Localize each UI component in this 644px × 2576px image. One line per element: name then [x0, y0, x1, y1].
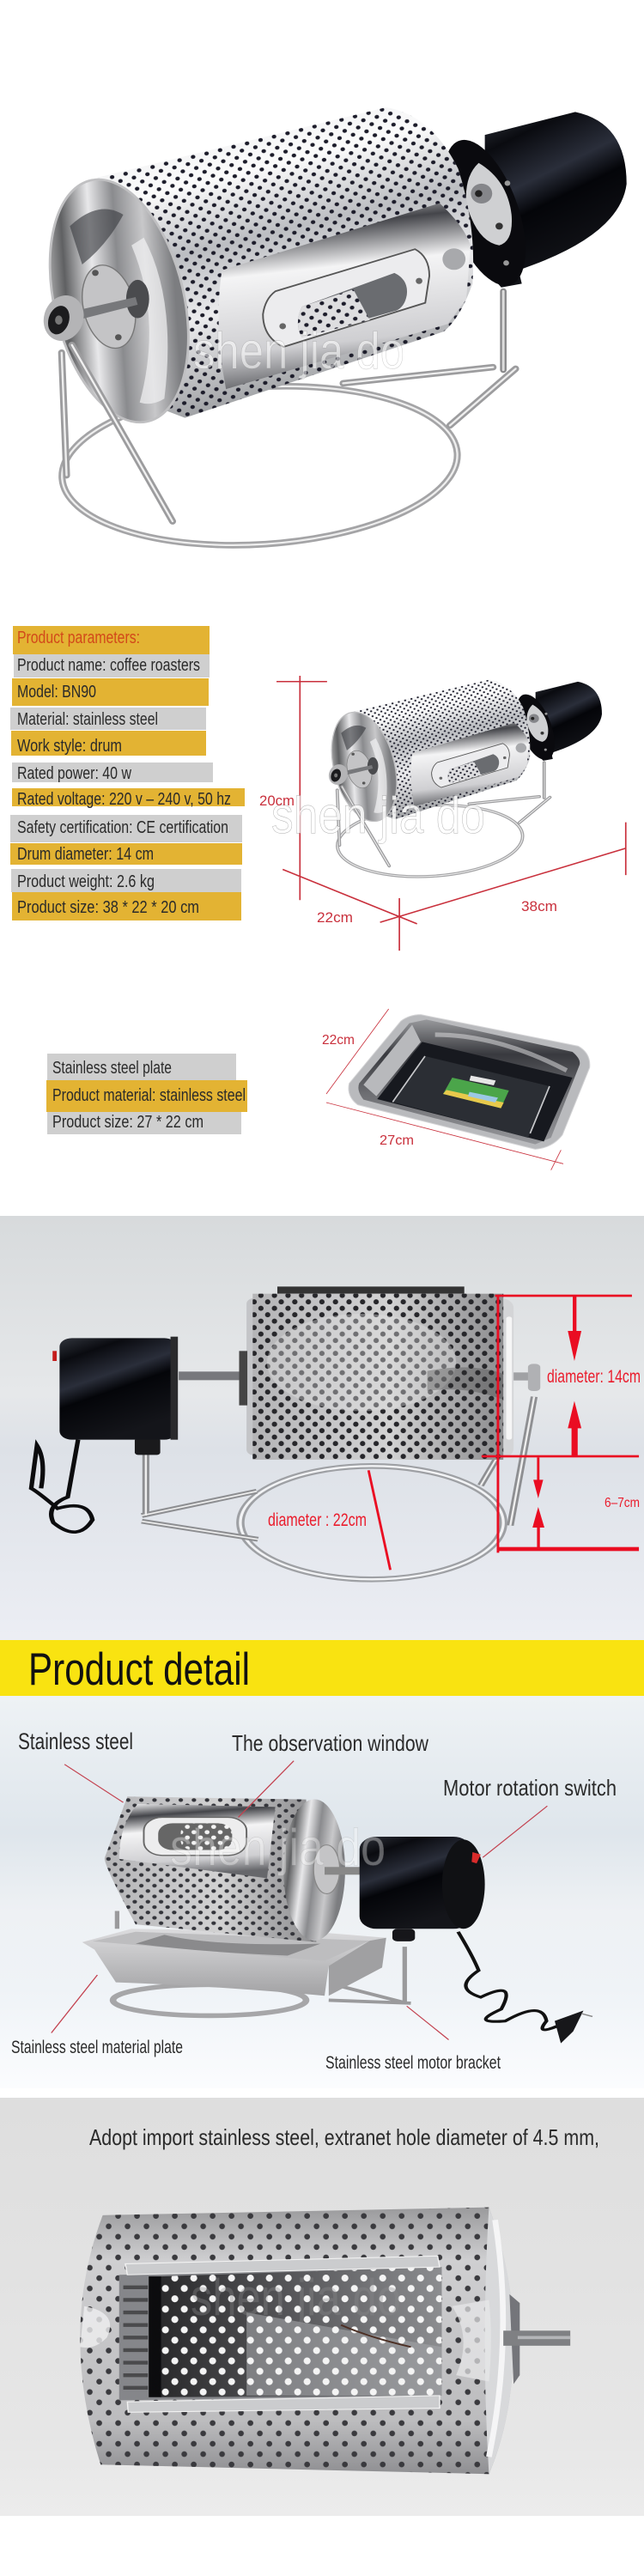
- row: rated power: Rated power: 40 w: [17, 764, 131, 783]
- red measurement marks: [482, 1295, 639, 1552]
- row: safety certification: [10, 815, 242, 842]
- watermark: shen jia do: [191, 2269, 401, 2326]
- row: product weight: [11, 869, 241, 892]
- drum: [105, 1796, 316, 1942]
- dimensioned roaster diagram: [259, 676, 626, 951]
- panel: product detail photo: [0, 1696, 644, 2088]
- row: product name: [14, 654, 210, 677]
- row: product size: [12, 892, 241, 920]
- motor: [59, 1338, 177, 1440]
- row: model: Model: BN90: [17, 683, 96, 702]
- row: product name: Product name: coffee roasters: [17, 656, 200, 675]
- row: safety certification: Safety certification: CE certification: [17, 818, 228, 837]
- label: width: 38cm: [521, 898, 557, 914]
- row: product size: Product size: 38 * 22 * 20 cm: [17, 898, 199, 917]
- callout: observation window: The observation window: [232, 1730, 428, 1756]
- heading: product parameters: [13, 626, 210, 654]
- callout: stainless steel: Stainless steel: [18, 1728, 133, 1754]
- watermark: shen jia do: [193, 322, 404, 380]
- panel: side view photo with measurements: [0, 1216, 644, 1640]
- row: work style: [11, 731, 206, 756]
- row: plate name: Stainless steel plate: [52, 1059, 172, 1078]
- watermark: shen jia do: [271, 787, 485, 844]
- label: stand diameter: diameter : 22cm: [268, 1510, 367, 1530]
- row: plate size: Product size: 27 * 22 cm: [52, 1113, 204, 1132]
- row: rated voltage: Rated voltage: 220 v – 240 v, 50 hz: [17, 790, 231, 809]
- dimension lines: [276, 676, 626, 951]
- label: plate width: 27cm: [380, 1133, 414, 1148]
- plate diagram: [322, 1009, 590, 1170]
- panel: product parameters: [10, 626, 245, 920]
- shaft: [509, 2294, 519, 2384]
- drum shell: [80, 2208, 513, 2474]
- row: product weight: Product weight: 2.6 kg: [17, 872, 155, 891]
- row: drum diameter: Drum diameter: 14 cm: [17, 845, 154, 864]
- stand: [142, 1397, 534, 1579]
- window: [119, 2267, 441, 2400]
- power cord: [31, 1440, 93, 1532]
- row: plate material: [46, 1080, 247, 1112]
- row: plate material: Product material: stainless steel: [52, 1086, 246, 1105]
- banner: product detail: Product detail: [28, 1644, 250, 1695]
- banner: product detail: [0, 1640, 644, 1696]
- callout: material plate: Stainless steel material plate: [11, 2038, 183, 2057]
- callout: motor switch: Motor rotation switch: [443, 1775, 617, 1801]
- label: plate depth: 22cm: [322, 1033, 355, 1048]
- row: work style: Work style: drum: [17, 737, 122, 756]
- label: height: 20cm: [259, 793, 295, 809]
- plate sticker: [443, 1078, 509, 1109]
- plate: [349, 1015, 590, 1149]
- row: rated power: [12, 762, 213, 783]
- watermark: shen jia do: [170, 1819, 386, 1876]
- heading: product parameters: Product parameters:: [17, 629, 140, 647]
- motor: [360, 1837, 471, 1929]
- callout lines: [52, 1761, 547, 2039]
- row: model: [12, 678, 209, 706]
- side rails: [125, 2256, 440, 2275]
- power cord and plug: [459, 1932, 559, 2030]
- row: plate name: [47, 1054, 236, 1080]
- end cap: [485, 2208, 513, 2474]
- row: material: Material: stainless steel: [17, 710, 158, 729]
- label: depth: 22cm: [317, 909, 353, 926]
- plate: [82, 1929, 386, 1996]
- callout: motor bracket: Stainless steel motor bracket: [325, 2053, 501, 2073]
- hero roaster photo: [28, 107, 627, 557]
- panel: plate parameters: [46, 1054, 247, 1134]
- stand ring: [113, 1984, 306, 2015]
- panel: drum close-up photo: [0, 2098, 644, 2516]
- row: drum diameter: [10, 843, 242, 865]
- drum: [485, 1298, 513, 1458]
